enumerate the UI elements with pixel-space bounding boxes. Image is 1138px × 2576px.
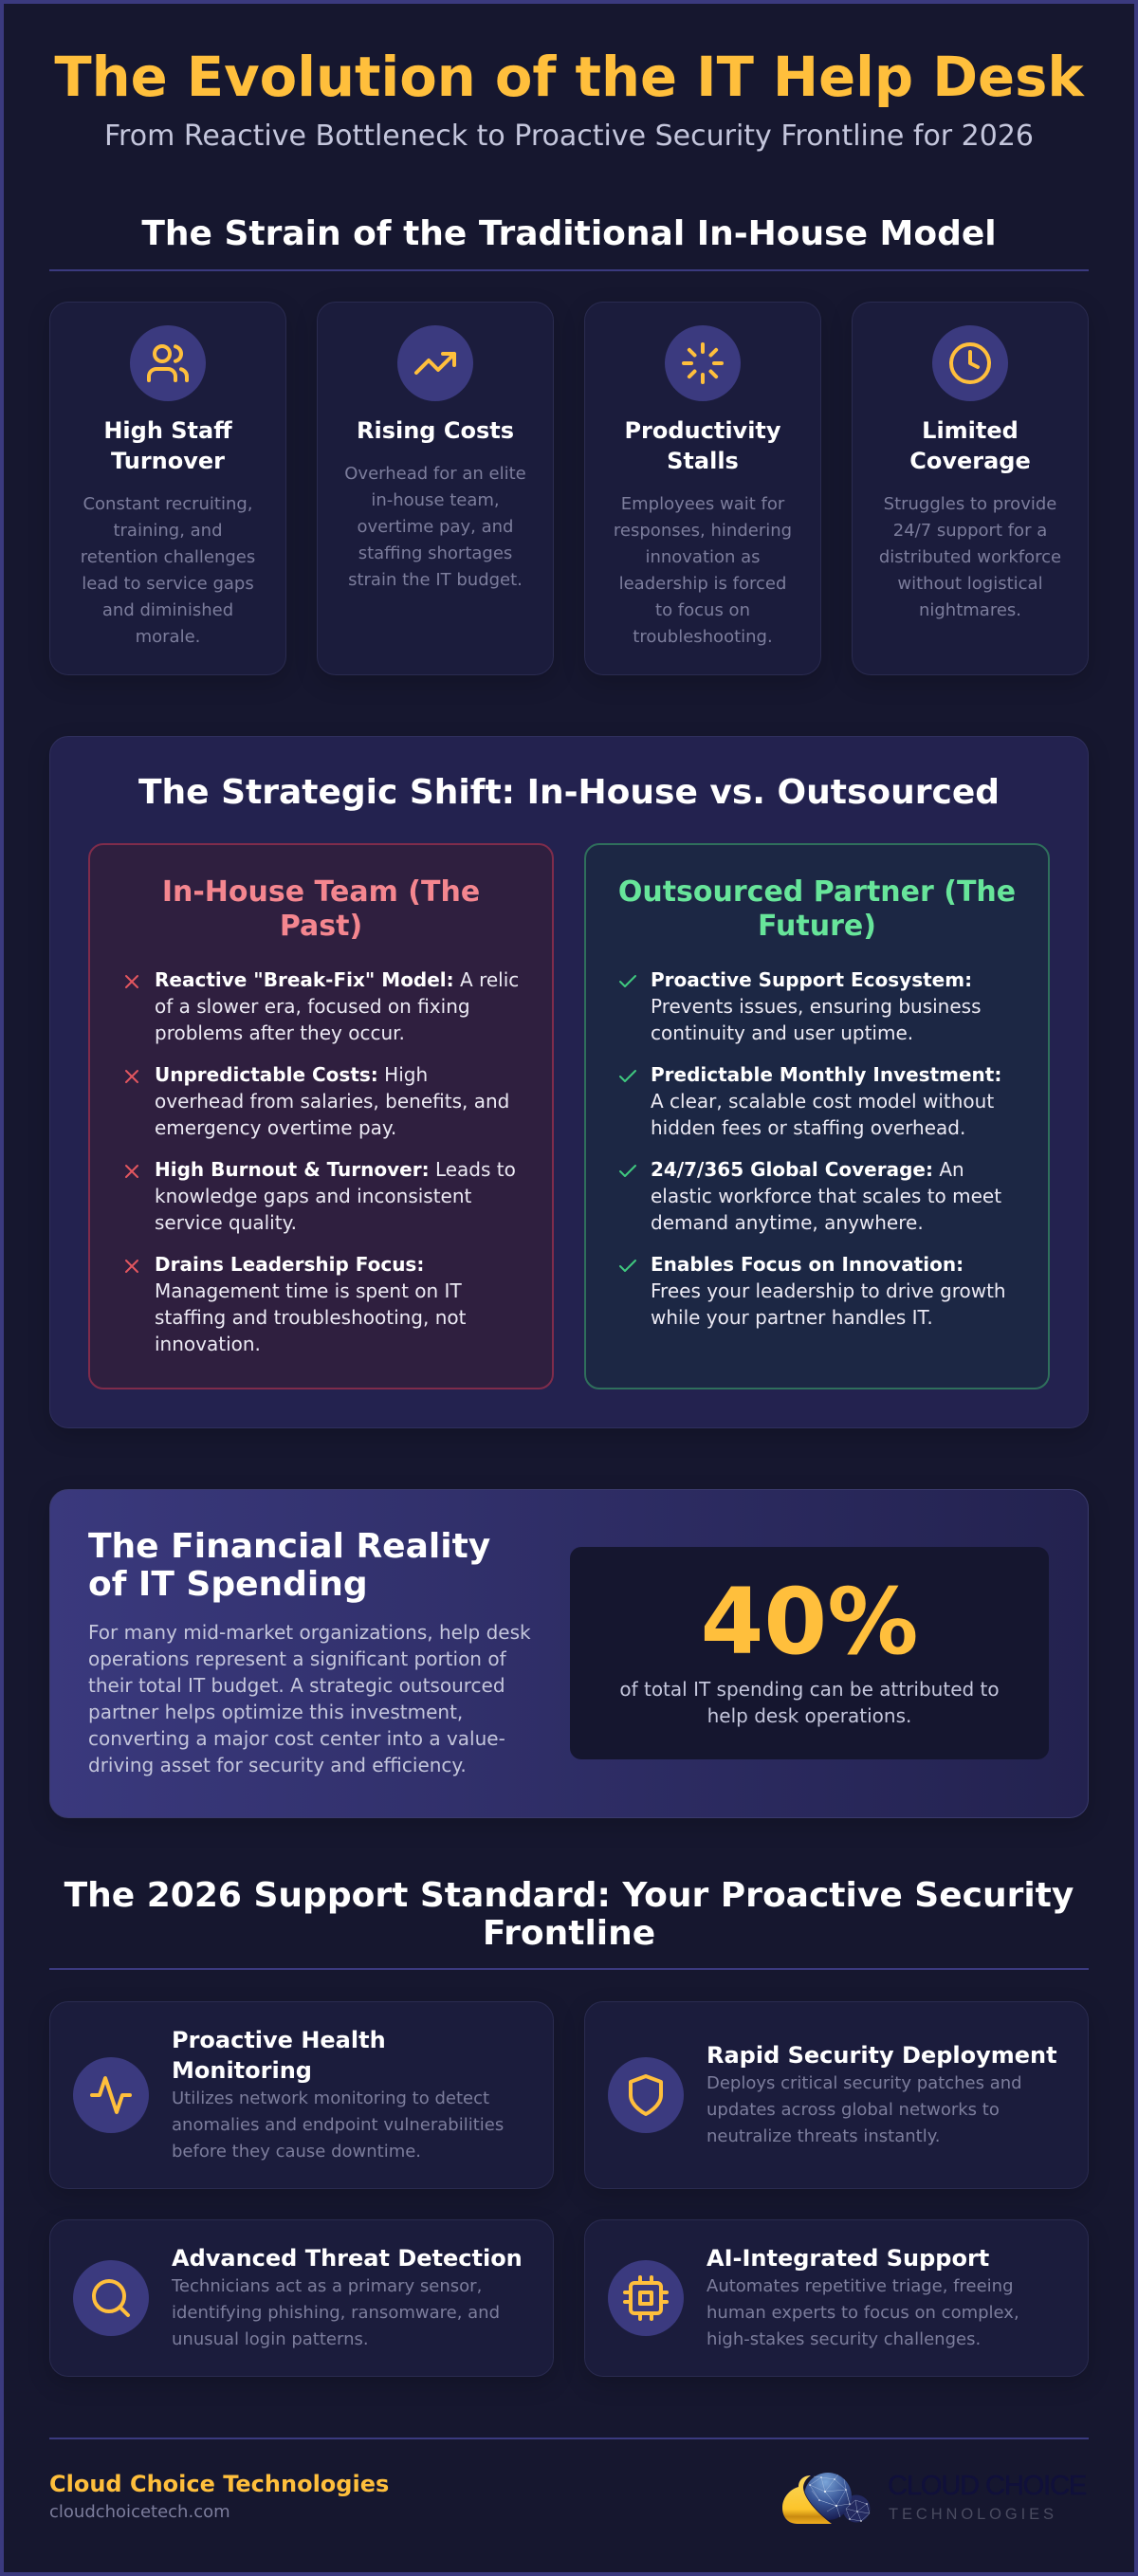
subtitle: From Reactive Bottleneck to Proactive Security Frontline for 2026 bbox=[104, 120, 1034, 153]
item bbox=[619, 968, 981, 1044]
card text: staffing shortages bbox=[358, 543, 512, 563]
item: Proactive Support Ecosystem: bbox=[651, 968, 972, 991]
card text: Advanced Threat Detection bbox=[172, 2245, 523, 2272]
stat: 40 percent: 40% bbox=[701, 1569, 918, 1675]
financial heading bbox=[88, 1527, 490, 1604]
item: knowledge gaps and inconsistent bbox=[155, 1185, 471, 1207]
card text: overtime pay, and bbox=[358, 517, 513, 537]
card text: retention challenges bbox=[81, 547, 255, 567]
card text: Deploys critical security patches and bbox=[707, 2073, 1022, 2093]
panel: financial reality bbox=[49, 1489, 1089, 1818]
item bbox=[125, 1253, 466, 1355]
section heading: 2026 standard: The 2026 Support Standard: Your Proactive Security bbox=[64, 1876, 1074, 1915]
card text: troubleshooting. bbox=[633, 627, 773, 647]
panel: strategic shift comparison bbox=[49, 736, 1089, 1428]
card text: responses, hindering bbox=[614, 521, 792, 541]
card: rapid security deployment bbox=[584, 2001, 1089, 2189]
card text: 24/7 support for a bbox=[893, 521, 1047, 541]
in-house heading: In-House Team (The bbox=[162, 875, 480, 909]
icon: loader bbox=[665, 325, 741, 401]
card text: strain the IT budget. bbox=[348, 570, 523, 590]
financial text: driving asset for security and efficiency. bbox=[88, 1754, 467, 1776]
item: hidden fees or staffing overhead. bbox=[651, 1116, 965, 1139]
item: Enables Focus on Innovation: bbox=[651, 1253, 964, 1276]
card: rising costs bbox=[317, 302, 554, 675]
stat caption: of total IT spending can be attributed to bbox=[619, 1678, 1000, 1701]
item: Management time is spent on IT bbox=[155, 1279, 462, 1302]
financial text: partner helps optimize this investment, bbox=[88, 1701, 463, 1723]
card heading: Productivity bbox=[624, 417, 781, 444]
item: service quality. bbox=[155, 1211, 297, 1234]
financial heading: of IT Spending bbox=[88, 1565, 368, 1604]
item: Frees your leadership to drive growth bbox=[651, 1279, 1006, 1302]
icon: cpu bbox=[608, 2260, 684, 2336]
financial text bbox=[88, 1621, 531, 1776]
outsourced heading bbox=[618, 875, 1016, 943]
item: of a slower era, focused on fixing bbox=[155, 995, 470, 1018]
card text: anomalies and endpoint vulnerabilities bbox=[172, 2115, 504, 2135]
card heading bbox=[624, 417, 781, 474]
title: The Evolution of the IT Help Desk bbox=[54, 46, 1084, 109]
section heading: 2026 standard bbox=[64, 1876, 1074, 1953]
item: problems after they occur. bbox=[155, 1021, 405, 1044]
card heading: Rising Costs bbox=[357, 417, 514, 444]
card: proactive health monitoring bbox=[49, 2001, 554, 2189]
stat box bbox=[570, 1547, 1049, 1759]
card text: updates across global networks to bbox=[707, 2100, 1000, 2120]
card text bbox=[171, 2245, 523, 2349]
card: productivity stalls bbox=[584, 302, 821, 675]
section heading: 2026 standard: Frontline bbox=[483, 1914, 655, 1953]
card: ai-integrated support bbox=[584, 2219, 1089, 2377]
panel heading: The Strategic Shift: In-House vs. Outsourced bbox=[138, 773, 1000, 812]
card text bbox=[707, 2042, 1057, 2146]
item bbox=[125, 1063, 509, 1139]
card heading: Turnover bbox=[111, 448, 225, 474]
item: elastic workforce that scales to meet bbox=[651, 1185, 1001, 1207]
item: demand anytime, anywhere. bbox=[651, 1211, 924, 1234]
stat caption: help desk operations. bbox=[707, 1704, 911, 1727]
financial text: operations represent a significant portion of bbox=[88, 1647, 506, 1670]
item: Predictable Monthly Investment: bbox=[651, 1063, 1001, 1086]
item: Prevents issues, ensuring business bbox=[651, 995, 981, 1018]
card text bbox=[707, 2245, 1019, 2349]
card text bbox=[614, 494, 792, 647]
card heading: Limited bbox=[922, 417, 1019, 444]
card text: Employees wait for bbox=[621, 494, 784, 514]
icon: users bbox=[130, 325, 206, 401]
financial heading: The Financial Reality bbox=[88, 1527, 490, 1566]
in-house heading: Past) bbox=[280, 910, 362, 943]
financial text: their total IT budget. A strategic outsourced bbox=[88, 1674, 505, 1697]
item: emergency overtime pay. bbox=[155, 1116, 396, 1139]
card heading bbox=[103, 417, 232, 474]
icon: trending up bbox=[397, 325, 473, 401]
stat caption bbox=[619, 1678, 1000, 1727]
icon: clock bbox=[932, 325, 1008, 401]
footer: website: cloudchoicetech.com bbox=[49, 2502, 230, 2522]
card text: to focus on bbox=[655, 600, 750, 620]
card text: Proactive Health bbox=[172, 2027, 386, 2053]
icon: shield bbox=[608, 2057, 684, 2133]
card text: Technicians act as a primary sensor, bbox=[172, 2276, 482, 2296]
item bbox=[125, 1158, 516, 1234]
card: advanced threat detection bbox=[49, 2219, 554, 2377]
card: high staff turnover bbox=[49, 302, 286, 675]
panel: in-house team bbox=[88, 843, 554, 1389]
item: Drains Leadership Focus: bbox=[155, 1253, 424, 1276]
card text: nightmares. bbox=[919, 600, 1021, 620]
card text: leadership is forced bbox=[619, 574, 786, 594]
item: High Burnout & Turnover: Leads to bbox=[155, 1158, 516, 1181]
footer: company name: Cloud Choice Technologies bbox=[49, 2471, 389, 2497]
card text: human experts to focus on complex, bbox=[707, 2303, 1019, 2323]
item: innovation. bbox=[155, 1333, 261, 1355]
card heading: Coverage bbox=[909, 448, 1031, 474]
card text: morale. bbox=[136, 627, 200, 647]
card text bbox=[172, 2027, 504, 2162]
in-house heading bbox=[162, 875, 480, 943]
card text: in-house team, bbox=[371, 490, 500, 510]
card text: unusual login patterns. bbox=[172, 2329, 369, 2349]
card text: Automates repetitive triage, freeing bbox=[707, 2276, 1013, 2296]
card text: Constant recruiting, bbox=[83, 494, 253, 514]
card heading bbox=[909, 417, 1031, 474]
financial text: converting a major cost center into a value- bbox=[88, 1727, 505, 1750]
section heading: strain: The Strain of the Traditional In-House Model bbox=[141, 214, 997, 253]
card text: and diminished bbox=[102, 600, 233, 620]
card text bbox=[344, 464, 526, 590]
card text: distributed workforce bbox=[879, 547, 1061, 567]
item bbox=[619, 1158, 1001, 1234]
card text: neutralize threats instantly. bbox=[707, 2126, 941, 2146]
icon: activity bbox=[73, 2057, 149, 2133]
card text: Utilizes network monitoring to detect bbox=[172, 2088, 489, 2108]
item: 24/7/365 Global Coverage: An bbox=[651, 1158, 964, 1181]
card text bbox=[81, 494, 255, 647]
icon: search bbox=[73, 2260, 149, 2336]
card heading: High Staff bbox=[103, 417, 232, 444]
item: staffing and troubleshooting, not bbox=[155, 1306, 466, 1329]
outsourced heading: Outsourced Partner (The bbox=[618, 875, 1016, 909]
card: limited coverage bbox=[852, 302, 1089, 675]
logo tagline: TECHNOLOGIES bbox=[889, 2506, 1057, 2523]
logo wordmark: CLOUD CHOICE bbox=[888, 2471, 1086, 2501]
card text: before they cause downtime. bbox=[172, 2142, 421, 2162]
card text: high-stakes security challenges. bbox=[707, 2329, 981, 2349]
item: Reactive "Break-Fix" Model: A relic bbox=[155, 968, 519, 991]
card text: AI-Integrated Support bbox=[707, 2245, 989, 2272]
card text: Monitoring bbox=[172, 2057, 312, 2084]
item: A clear, scalable cost model without bbox=[651, 1090, 994, 1113]
item bbox=[125, 968, 519, 1044]
card text: Struggles to provide bbox=[884, 494, 1056, 514]
panel: outsourced partner bbox=[584, 843, 1050, 1389]
card text bbox=[879, 494, 1061, 620]
logo: cloud and globes bbox=[781, 2473, 871, 2525]
financial text: For many mid-market organizations, help desk bbox=[88, 1621, 531, 1644]
card text: training, and bbox=[113, 521, 223, 541]
card text: lead to service gaps bbox=[82, 574, 254, 594]
card heading: Stalls bbox=[667, 448, 739, 474]
card text: Rapid Security Deployment bbox=[707, 2042, 1057, 2069]
card text: innovation as bbox=[645, 547, 761, 567]
item bbox=[619, 1253, 1006, 1329]
card text: without logistical bbox=[897, 574, 1043, 594]
item: Unpredictable Costs: High bbox=[155, 1063, 428, 1086]
item bbox=[619, 1063, 1001, 1139]
item: overhead from salaries, benefits, and bbox=[155, 1090, 509, 1113]
card text: Overhead for an elite bbox=[344, 464, 526, 484]
card text: identifying phishing, ransomware, and bbox=[172, 2303, 500, 2323]
item: while your partner handles IT. bbox=[651, 1306, 933, 1329]
outsourced heading: Future) bbox=[758, 910, 876, 943]
item: continuity and user uptime. bbox=[651, 1021, 913, 1044]
